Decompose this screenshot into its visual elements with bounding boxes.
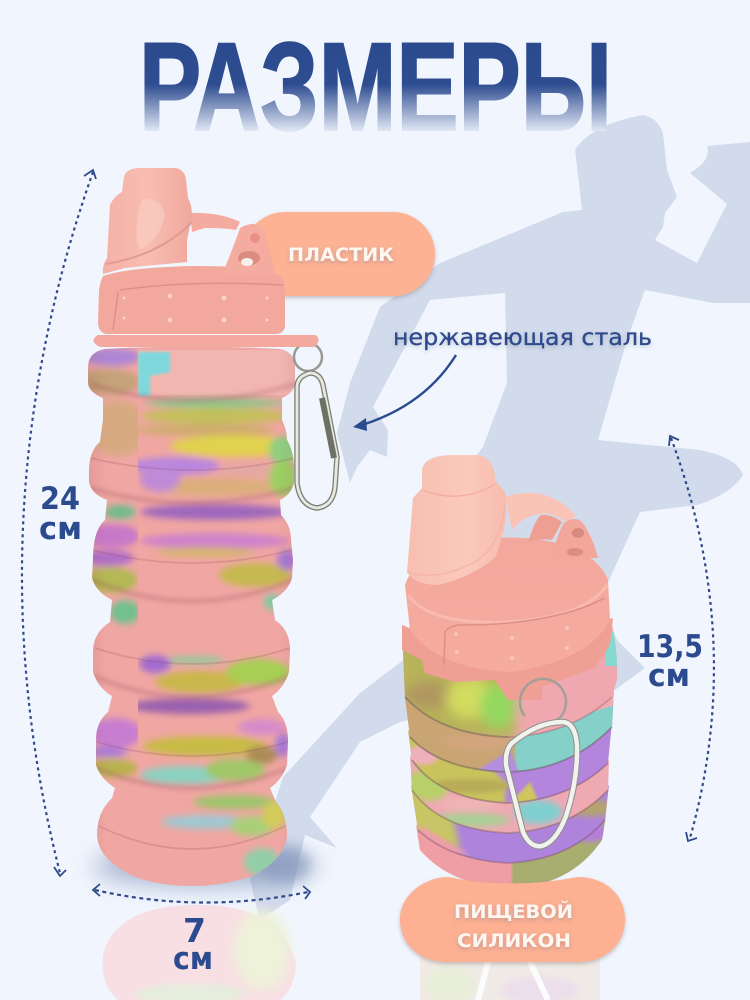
label pill: plastic: ПЛАСТИК (288, 244, 394, 266)
carabiner (294, 343, 337, 508)
dimension: 13,5 cm (637, 629, 703, 694)
label pill: food silicone: ПИЩЕВОЙ (454, 900, 573, 923)
inner strap (528, 515, 562, 542)
ring 5 (411, 785, 609, 863)
athlete silhouette (250, 115, 750, 920)
dimension: 24 cm (39, 481, 82, 547)
label pill: food silicone: СИЛИКОН (457, 930, 571, 952)
lid flange (93, 335, 319, 347)
lid flange (402, 618, 613, 700)
dimension: 7 cm (173, 911, 213, 977)
reflection: small bottle (420, 950, 600, 1000)
left of seam patches (88, 348, 138, 781)
silicone body (396, 625, 620, 890)
spout cap (103, 168, 192, 274)
label pill: food silicone (400, 877, 625, 962)
tall bottle (76, 168, 337, 890)
ring 3 (408, 728, 612, 803)
arrow to carabiner (353, 355, 456, 431)
small bottle (396, 455, 620, 890)
ring 2 (405, 690, 614, 772)
dimension: 7 cm: 7 (183, 911, 206, 950)
ring 6 (416, 815, 606, 884)
reflection: tall bottle (103, 905, 296, 1000)
silicone body (88, 347, 295, 886)
dimension: 13,5 cm: 13,5 (637, 629, 703, 665)
height arc: tall bottle (22, 170, 96, 876)
width arc: tall bottle (93, 884, 310, 903)
strap and tab (190, 213, 276, 275)
carabiner (506, 673, 577, 846)
ring edges (90, 458, 295, 849)
callout: stainless steel: нержавеющая сталь (393, 325, 652, 351)
lid body (405, 538, 610, 672)
dimension: 24 cm: 24 (40, 481, 80, 517)
ring 4 (410, 755, 609, 833)
strap (505, 493, 576, 530)
right of seam patches (130, 350, 300, 876)
floor shadow: tall bottle (93, 846, 317, 886)
height arc: small bottle (669, 436, 714, 841)
label pill: plastic (243, 212, 435, 296)
lid (98, 266, 285, 334)
spout cap (407, 455, 506, 585)
ring undersides (90, 384, 295, 788)
tab (552, 519, 598, 558)
dimension: 13,5 cm: см (648, 658, 690, 694)
dimension: 7 cm: см (173, 941, 213, 977)
dimension: 24 cm: см (39, 511, 82, 547)
ring 1 (396, 625, 620, 740)
